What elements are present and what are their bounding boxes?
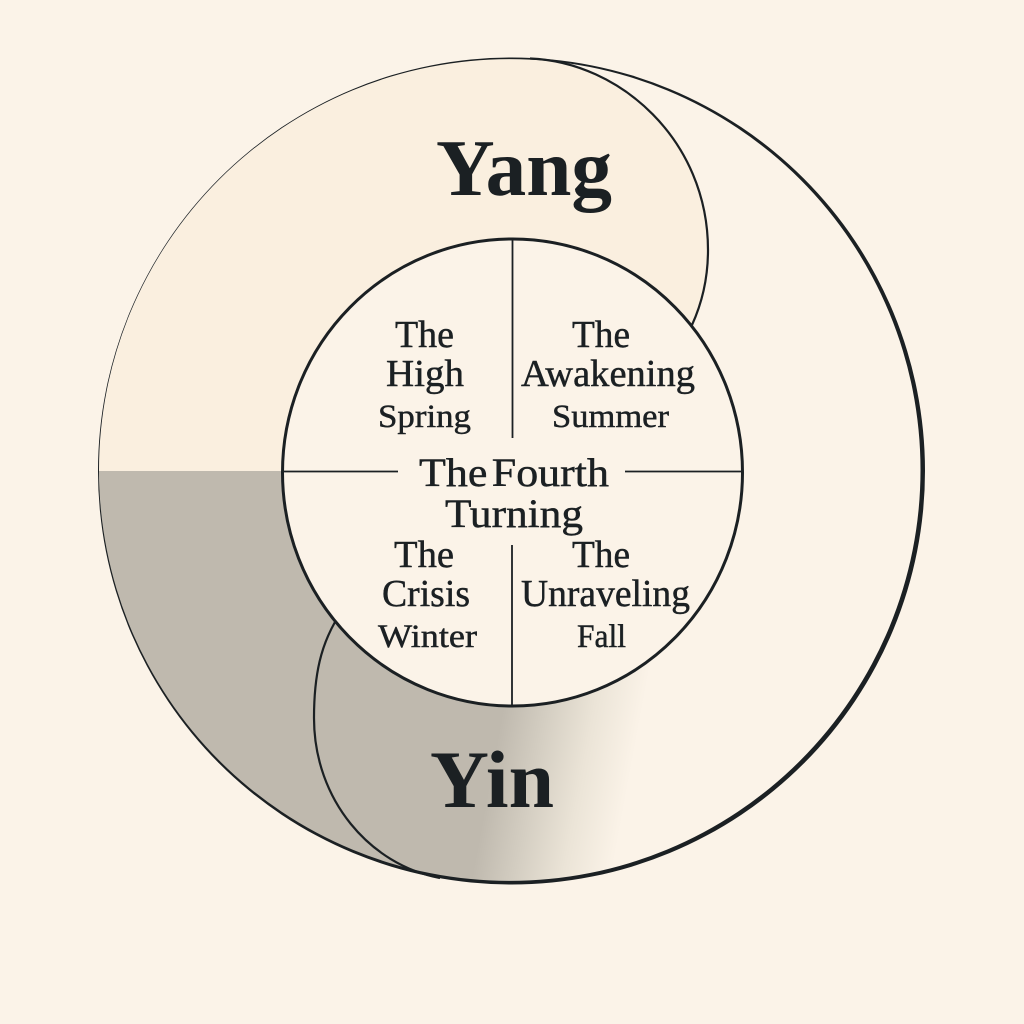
- center label: The Fourth Turning: Turning: [445, 491, 583, 536]
- quadrant: The Crisis, Winter: Winter: [378, 619, 477, 655]
- quadrant: The High, Spring: High: [386, 353, 464, 395]
- quadrant: The Awakening, Summer: Awakening: [521, 353, 695, 395]
- inner circle: [282, 239, 742, 706]
- quadrant: The Unraveling, Fall: The: [572, 534, 630, 576]
- center label: The Fourth Turning: The Fourth: [419, 450, 609, 495]
- quadrant: The Unraveling, Fall: [521, 534, 690, 655]
- yin region: grey swirl fading to cream: [99, 471, 924, 883]
- heading: Yang: Yang: [436, 125, 612, 213]
- quadrant: The High, Spring: [378, 314, 471, 435]
- center label: The Fourth Turning: [419, 450, 609, 536]
- quadrant: The Crisis, Winter: [378, 534, 477, 655]
- quadrant: The Unraveling, Fall: Unraveling: [521, 573, 690, 615]
- heading: Yin: Yin: [430, 734, 554, 825]
- yin swirl edge: [314, 622, 440, 878]
- quadrant: The Awakening, Summer: The: [572, 314, 630, 356]
- quadrant: The Crisis, Winter: Crisis: [382, 573, 470, 615]
- quadrant: The High, Spring: The: [395, 314, 454, 356]
- yang swirl edge: [530, 58, 708, 325]
- quadrant dividers: [283, 239, 742, 706]
- quadrant: The Unraveling, Fall: Fall: [577, 619, 626, 655]
- quadrant: The Awakening, Summer: Summer: [552, 399, 669, 435]
- quadrant: The Crisis, Winter: The: [394, 534, 454, 576]
- yang region: cream swirl: [99, 59, 708, 472]
- quadrant: The High, Spring: Spring: [378, 399, 471, 435]
- quadrant: The Awakening, Summer: [521, 314, 695, 435]
- outer circle outline: [98, 58, 925, 885]
